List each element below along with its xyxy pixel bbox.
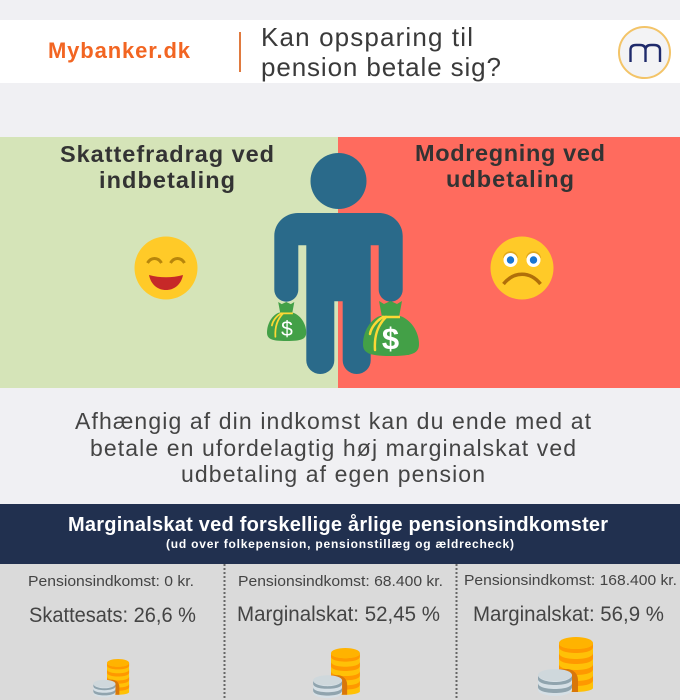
icon: small money bag	[267, 302, 306, 341]
explanatory text	[75, 408, 592, 487]
icon: person with money bags	[267, 153, 419, 374]
explanatory text: Afhængig af din indkomst kan du ende med at	[75, 408, 592, 434]
brand name: Mybanker.dk	[48, 38, 191, 63]
column: 0 kr: Skattesats: 26,6 %	[29, 604, 196, 627]
column: 168.400 kr: Pensionsindkomst: 168.400 kr.	[464, 572, 677, 589]
icon: large coin stack	[538, 637, 593, 696]
hero panel	[0, 137, 680, 388]
explanatory text: udbetaling af egen pension	[181, 461, 485, 487]
column: 168.400 kr: Marginalskat: 56,9 %	[473, 603, 664, 626]
page title: Kan opsparing til	[261, 22, 473, 52]
column: 168.400 kr	[464, 572, 677, 696]
column: 68.400 kr	[237, 573, 443, 698]
icon: medium coin stack	[313, 648, 360, 698]
table header band	[0, 504, 680, 564]
comparison panel	[0, 564, 680, 700]
logo	[619, 27, 670, 78]
icon: sad face	[490, 236, 554, 300]
icon: happy face	[134, 236, 198, 300]
panel: tax deduction	[0, 137, 338, 388]
icon: large money bag	[363, 301, 419, 356]
column: 0 kr	[28, 573, 196, 697]
page title: pension betale sig?	[261, 52, 501, 82]
heading: tax deduction: indbetaling	[99, 167, 235, 193]
heading: tax deduction: Skattefradrag ved	[60, 141, 274, 167]
heading: tax deduction	[60, 141, 274, 193]
header band	[0, 20, 680, 83]
column: 0 kr: Pensionsindkomst: 0 kr.	[28, 573, 194, 590]
heading: offset	[415, 140, 605, 192]
heading: offset: Modregning ved	[415, 140, 605, 166]
column: 68.400 kr: Marginalskat: 52,45 %	[237, 603, 440, 626]
heading: offset: udbetaling	[446, 166, 574, 192]
icon: small coin stack	[93, 659, 129, 697]
column: 68.400 kr: Pensionsindkomst: 68.400 kr.	[238, 573, 443, 590]
page title	[261, 22, 501, 82]
explanatory text: betale en ufordelagtig høj marginalskat ved	[90, 435, 576, 461]
header divider	[239, 32, 241, 72]
icon: small money bag: $	[281, 318, 293, 341]
panel: offset	[338, 137, 680, 388]
table header band: (ud over folkepension, pensionstillæg og ældrecheck)	[166, 537, 514, 551]
icon: large money bag: $	[382, 321, 399, 356]
table header band: Marginalskat ved forskellige årlige pensionsindkomster	[68, 513, 608, 536]
